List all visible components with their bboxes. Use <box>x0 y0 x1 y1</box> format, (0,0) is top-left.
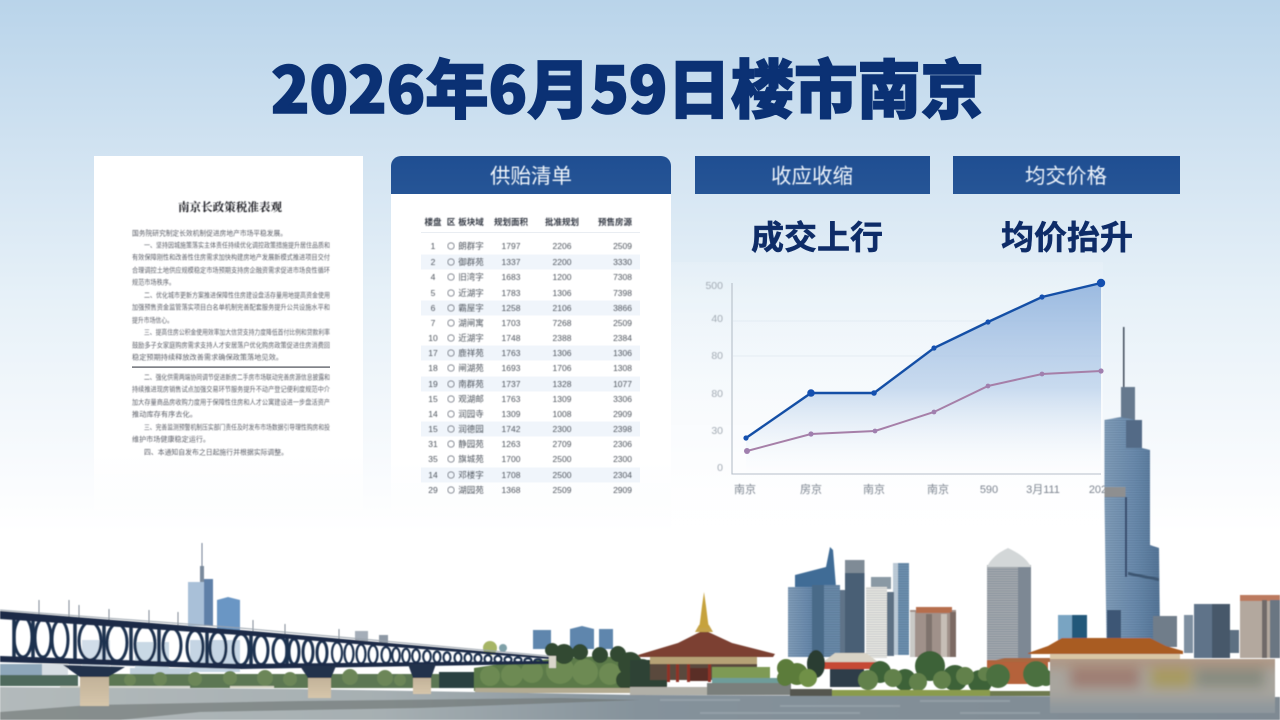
document body text: 维护市场健康稳定运行。 <box>132 434 210 444</box>
chart y axis labels: 80 <box>711 388 723 400</box>
table second value column: 1328 <box>553 379 572 389</box>
document body text: 一、坚持因城施策落实主体责任持续优化调控政策措施提升居住品质和 <box>144 240 330 250</box>
zifeng tower <box>1104 327 1160 640</box>
table third value column: 2509 <box>613 318 632 328</box>
water reflections right <box>660 699 1040 714</box>
document body text: 提升市场信心。 <box>132 316 173 324</box>
table name column: 闸湖苑 <box>458 363 484 373</box>
table header row: 预售房源 <box>598 217 632 227</box>
table number column: 31 <box>428 439 438 449</box>
table third value column: 2909 <box>613 485 632 495</box>
table number column: 5 <box>431 288 436 298</box>
table number column: 15 <box>428 424 438 434</box>
document body text: 有效保障刚性和改善性住房需求加快构建房地产发展新模式推进项目交付 <box>132 252 330 262</box>
chart x axis labels: 590 <box>980 484 998 496</box>
chart series: blue <box>743 279 1105 441</box>
table number column: 17 <box>428 348 438 358</box>
table header row: 楼盘 <box>424 217 442 227</box>
chart x axis labels: 南京 <box>927 482 949 496</box>
title: 2026年6月59日楼市南京 <box>271 40 984 132</box>
bridge pier caps <box>63 664 436 678</box>
document body text: 稳定预期持续释放改善需求确保政策落地见效。 <box>132 352 283 362</box>
table second value column: 2206 <box>553 241 572 251</box>
chart axes <box>732 283 1101 474</box>
table number column: 10 <box>428 333 438 343</box>
chart y axis labels: 0 <box>717 462 723 474</box>
table number column: 7 <box>431 318 436 328</box>
subheading: average price up: 均价抬升 <box>1001 219 1133 256</box>
chart area fill <box>746 283 1101 474</box>
table row icons <box>448 243 454 493</box>
chart x axis labels: 3月111 <box>1026 484 1060 496</box>
table third value column: 7398 <box>613 288 632 298</box>
table header row: 板块域 <box>458 217 484 227</box>
table third value column: 3330 <box>613 257 632 267</box>
document body text: 持续推进现房销售试点加强交易环节服务提升不动产登记便利度规范中介 <box>132 384 330 394</box>
table first value column: 1309 <box>502 409 521 419</box>
table name column: 旗城苑 <box>458 454 484 464</box>
chart y axis labels <box>705 280 723 474</box>
table name column <box>458 241 484 495</box>
table second value column: 1309 <box>553 394 572 404</box>
bridge guard rail <box>0 610 549 656</box>
glass tower <box>893 563 909 655</box>
document body text: 三、提高住房公积金使用效率加大信贷支持力度降低首付比例和贷款利率 <box>144 328 330 336</box>
document rule <box>132 366 330 368</box>
central low roof building <box>823 653 878 687</box>
table third value column: 2384 <box>613 333 632 343</box>
table third value column: 1306 <box>613 348 632 358</box>
table name column: 湖闸寓 <box>458 318 484 328</box>
table first value column: 1763 <box>502 394 521 404</box>
table third value column: 2509 <box>613 241 632 251</box>
chart x axis labels: 南京 <box>863 482 885 496</box>
table first value column: 1258 <box>502 303 521 313</box>
blurred watermark patch <box>1049 658 1276 713</box>
bridge lower chord <box>0 656 549 669</box>
table second value column: 1306 <box>553 288 572 298</box>
table number column: 19 <box>428 379 438 389</box>
document body text: 国务院研究制定长效机制促进房地产市场平稳发展。 <box>132 228 287 238</box>
table name column: 近湖字 <box>458 288 484 298</box>
heading bar: transaction <box>695 156 930 194</box>
table number column: 14 <box>428 470 438 480</box>
table heading bar <box>391 156 671 194</box>
table first value column <box>502 241 521 495</box>
table number column: 18 <box>428 363 438 373</box>
chart y axis labels: 500 <box>705 280 723 292</box>
table first value column: 1263 <box>502 439 521 449</box>
table number column <box>428 241 438 495</box>
panel: supply list table <box>391 156 671 530</box>
table first value column: 1368 <box>502 485 521 495</box>
table second value column: 1008 <box>553 409 572 419</box>
table first value column: 1337 <box>502 257 521 267</box>
table header row: 规划面积 <box>494 217 528 227</box>
document heading: 南京长政策税准表观 <box>178 200 283 214</box>
blue curved tower <box>788 547 840 657</box>
table first value column: 1683 <box>502 272 521 282</box>
far left towers <box>188 543 388 643</box>
bridge <box>0 600 556 678</box>
table third value column <box>613 241 632 495</box>
table third value column: 2398 <box>613 424 632 434</box>
haze buildings behind bridge <box>0 640 240 676</box>
table name column: 邓楼字 <box>458 470 484 480</box>
table third value column: 2304 <box>613 470 632 480</box>
table name column: 湖园苑 <box>458 485 484 495</box>
table third value column: 2306 <box>613 439 632 449</box>
table third value column: 2300 <box>613 454 632 464</box>
table name column: 旧湾字 <box>458 272 484 282</box>
mid distance blue towers <box>533 626 613 649</box>
table name column: 润园寺 <box>458 409 484 419</box>
document body text: 二、优化城市更新方案推进保障性住房建设盘活存量用地提高资金使用 <box>144 290 330 300</box>
table first value column: 1737 <box>502 379 521 389</box>
grey tower <box>840 560 864 655</box>
bridge truss arches <box>14 617 327 665</box>
bridge lamp posts <box>39 600 339 642</box>
chart x axis labels: 202 <box>1089 484 1107 496</box>
table name column: 御群苑 <box>458 257 484 267</box>
chart series: purple <box>744 368 1104 454</box>
table number column: 2 <box>431 257 436 267</box>
small glass buildings <box>1058 615 1087 641</box>
chart y axis labels: 80 <box>711 350 723 362</box>
table third value column: 3866 <box>613 303 632 313</box>
table first value column: 1693 <box>502 363 521 373</box>
table third value column: 1308 <box>613 363 632 373</box>
table second value column: 1706 <box>553 363 572 373</box>
table name column: 静园苑 <box>458 439 484 449</box>
bridge top chord <box>0 611 549 659</box>
bridge piers <box>80 677 431 706</box>
subheading: transactions up: 成交上行 <box>751 219 883 256</box>
table third value column: 2909 <box>613 409 632 419</box>
table header row <box>424 217 632 227</box>
chart y axis labels: 40 <box>711 313 723 325</box>
table header row: 区 <box>447 217 456 227</box>
table number column: 29 <box>428 485 438 495</box>
table name column: 润德园 <box>458 424 484 434</box>
heading bar: transaction: 收应收缩 <box>771 165 853 188</box>
table number column: 15 <box>428 394 438 404</box>
document body text: 鼓励多子女家庭购房需求支持人才安居落户优化购房政策促进住房消费回 <box>132 340 330 350</box>
table second value column: 2388 <box>553 333 572 343</box>
document body text: 推动库存有序去化。 <box>132 410 197 418</box>
table second value column: 1200 <box>553 272 572 282</box>
line chart <box>671 262 1107 532</box>
heading bar: average price <box>953 156 1180 194</box>
white block tower <box>866 577 894 658</box>
document body text: 加大存量商品房收购力度用于保障性住房和人才公寓建设进一步盘活资产 <box>132 398 330 406</box>
table second value column <box>553 241 572 495</box>
chart x axis labels: 房京 <box>800 482 822 496</box>
table second value column: 2106 <box>553 303 572 313</box>
table name column: 朗群字 <box>458 241 484 251</box>
zebra row stripes <box>421 254 640 482</box>
chart x axis labels: 南京 <box>734 482 756 496</box>
bridge truss posts <box>14 615 287 667</box>
red top residential tower <box>910 607 956 657</box>
chart x axis labels <box>734 482 1107 496</box>
table second value column: 7268 <box>553 318 572 328</box>
table third value column: 3306 <box>613 394 632 404</box>
table second value column: 2509 <box>553 485 572 495</box>
document body text: 三、完善监测预警机制压实部门责任及时发布市场数据引导理性购房和投 <box>144 422 330 432</box>
water <box>0 687 1280 720</box>
table second value column: 2500 <box>553 470 572 480</box>
skyline photo illustration <box>0 327 1280 720</box>
riverbank trees left <box>0 641 655 693</box>
table name column: 霸屋字 <box>458 303 484 313</box>
table third value column: 7308 <box>613 272 632 282</box>
heading bar: average price: 均交价格 <box>1025 165 1107 188</box>
table second value column: 2200 <box>553 257 572 267</box>
chart grid lines <box>733 321 1101 356</box>
table first value column: 1708 <box>502 470 521 480</box>
table second value column: 2500 <box>553 454 572 464</box>
table first value column: 1748 <box>502 333 521 343</box>
table number column: 35 <box>428 454 438 464</box>
table first value column: 1763 <box>502 348 521 358</box>
document body text: 加强预售资金监管落实项目白名单机制完善配套服务提升公共设施水平和 <box>132 302 330 312</box>
riverside trees centre <box>777 650 1054 696</box>
dome tower <box>987 548 1031 660</box>
table name column: 南群苑 <box>458 379 484 389</box>
table first value column: 1742 <box>502 424 521 434</box>
document body text <box>132 228 330 456</box>
right palace <box>987 638 1183 684</box>
right side towers <box>1153 595 1280 658</box>
table second value column: 1306 <box>553 348 572 358</box>
chart y axis labels: 30 <box>711 425 723 437</box>
table number column: 14 <box>428 409 438 419</box>
water ripple <box>0 698 640 720</box>
document body text: 规范市场秩序。 <box>132 278 175 286</box>
document body text: 合理调控土地供应规模稳定市场预期支持房企融资需求促进市场良性循环 <box>132 266 330 274</box>
table name column: 近湖字 <box>458 333 484 343</box>
table third value column: 1077 <box>613 379 632 389</box>
table number column: 4 <box>431 272 436 282</box>
table second value column: 2709 <box>553 439 572 449</box>
pagoda pavilion <box>630 592 791 695</box>
table name column: 鹿祥苑 <box>458 348 484 358</box>
panel: policy document <box>94 156 363 530</box>
table first value column: 1783 <box>502 288 521 298</box>
table header row: 批准规划 <box>545 217 579 227</box>
document body text: 二、强化供需两端协同调节促进新房二手房市场联动完善房源信息披露和 <box>144 372 330 382</box>
table second value column: 2300 <box>553 424 572 434</box>
bridge end abutment <box>549 656 556 668</box>
document body text: 四、本通知自发布之日起施行并根据实际调整。 <box>144 448 288 456</box>
table heading bar: 供贻清单 <box>490 165 572 188</box>
table first value column: 1700 <box>502 454 521 464</box>
table first value column: 1797 <box>502 241 521 251</box>
table name column: 观湖邮 <box>458 394 484 404</box>
table first value column: 1703 <box>502 318 521 328</box>
table number column: 1 <box>431 241 436 251</box>
table number column: 6 <box>431 303 436 313</box>
